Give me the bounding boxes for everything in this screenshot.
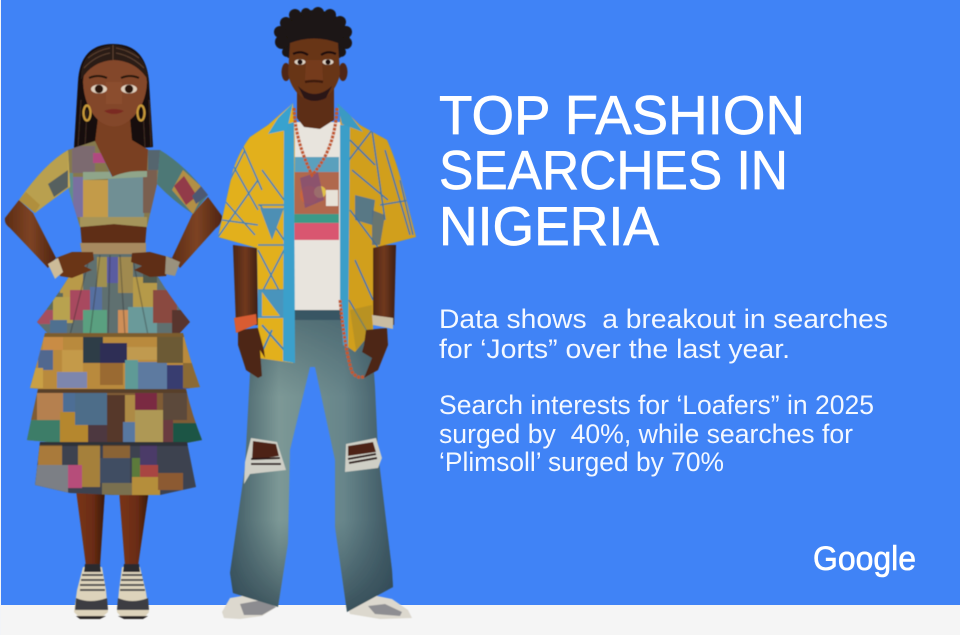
woman left sleeve xyxy=(18,150,71,214)
title: NIGERIA xyxy=(439,195,659,257)
man arms xyxy=(233,245,396,325)
text block: Loafers and Plimsoll surge: surged by 40%, while searches for xyxy=(439,419,853,449)
woman hands xyxy=(56,252,172,278)
man shirt placket left xyxy=(283,122,295,363)
woman neck and chest xyxy=(95,118,152,178)
woman hair back xyxy=(74,44,153,150)
man face xyxy=(282,38,348,102)
illustration: man in yellow shirt and ripped jeans xyxy=(210,7,420,619)
illustration: woman in patchwork outfit xyxy=(5,44,222,619)
text block: Loafers and Plimsoll surge: Search interests for ‘Loafers” in 2025 xyxy=(439,390,874,420)
woman skirt tier 4 xyxy=(30,440,200,496)
man left knee rip xyxy=(244,438,286,484)
man afro hair xyxy=(274,7,352,58)
Google logo: Google xyxy=(813,540,916,578)
text block: Jorts breakout: Data shows a breakout in searches xyxy=(439,304,888,334)
man right shirt panel xyxy=(339,116,417,352)
man shirt collar xyxy=(268,103,363,134)
man neck xyxy=(297,85,334,129)
woman skirt tier 2 xyxy=(29,332,201,390)
woman skirt tier 3 xyxy=(26,388,202,444)
woman legs xyxy=(76,490,149,566)
woman midriff xyxy=(80,222,147,246)
woman right sleeve xyxy=(156,150,208,214)
text block: Loafers and Plimsoll surge xyxy=(439,390,874,477)
text block: Jorts breakout: for ‘Jorts” over the last year. xyxy=(439,334,790,364)
title: SEARCHES IN xyxy=(439,139,788,201)
woman skirt tier 1 xyxy=(36,253,190,334)
woman face xyxy=(81,45,148,126)
man hands xyxy=(234,314,393,378)
man jeans xyxy=(230,305,393,612)
text block: Jorts breakout xyxy=(439,304,888,364)
text block: Loafers and Plimsoll surge: ‘Plimsoll’ surged by 70% xyxy=(439,447,724,477)
woman bracelets xyxy=(48,256,180,279)
man shoes xyxy=(222,595,412,619)
woman arms xyxy=(5,197,222,268)
woman waistband xyxy=(80,243,146,254)
woman sneakers xyxy=(74,564,149,619)
man t-shirt xyxy=(290,122,346,310)
man necklace xyxy=(294,108,365,377)
woman crop top xyxy=(67,140,161,228)
man right knee rip xyxy=(345,438,382,472)
title xyxy=(439,84,805,257)
man left shirt panel xyxy=(218,102,296,364)
title: TOP FASHION xyxy=(439,84,805,146)
off-white floor band xyxy=(0,605,960,635)
man shirt placket right xyxy=(340,125,350,348)
